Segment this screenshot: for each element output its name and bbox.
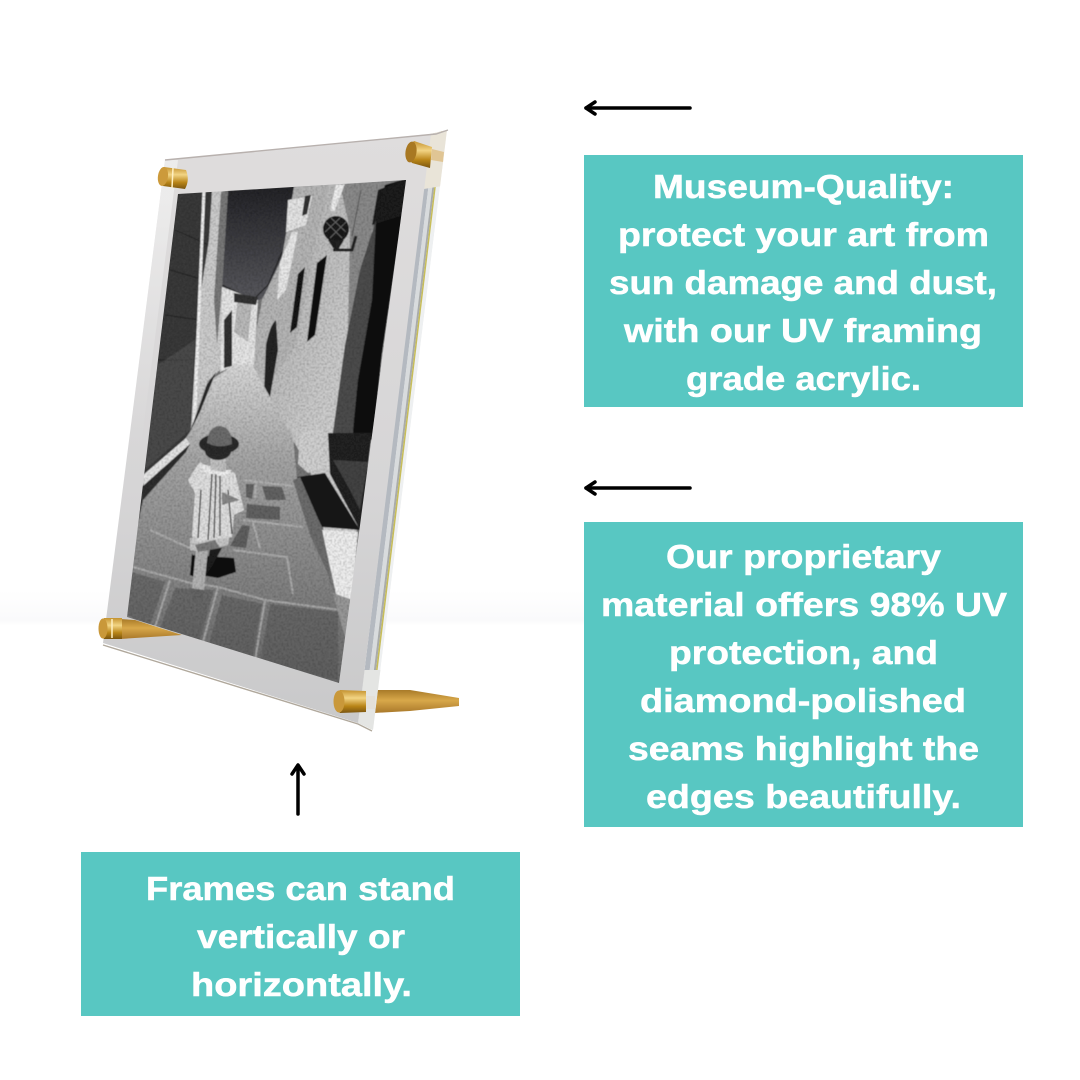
panel background [584, 155, 1023, 407]
lamp [323, 190, 361, 250]
child [188, 426, 244, 603]
standoff: top left [157, 166, 188, 189]
ground [132, 364, 341, 683]
bottom edge line [103, 645, 372, 731]
panel text: horizontally. [191, 966, 412, 1003]
left dark wall [138, 192, 212, 522]
dark doorway [352, 178, 408, 440]
panel text: seams highlight the [628, 730, 979, 767]
standoff: top right [404, 141, 444, 168]
panel text: diamond-polished [640, 682, 966, 719]
neck [210, 456, 226, 472]
collar [200, 462, 232, 476]
acrylic face [103, 134, 431, 723]
standoff: bottom right [334, 690, 375, 713]
panel text: material offers 98% UV [601, 586, 1007, 623]
panel: stand orientation [81, 852, 520, 1016]
left margin highlight [103, 160, 178, 647]
lane dark strip [190, 372, 216, 432]
panel text [609, 168, 997, 397]
building in upper right [277, 188, 306, 370]
panel text: vertically or [197, 918, 405, 955]
power cable [222, 252, 282, 300]
hat [198, 435, 240, 452]
panel text: grade acrylic. [686, 360, 921, 397]
panel text: sun damage and dust, [609, 264, 997, 301]
panel text [146, 870, 455, 1003]
panel: museum-quality [584, 155, 1023, 407]
arrow: to proprietary material panel [586, 482, 690, 494]
panel text: with our UV framing [623, 312, 982, 349]
windows [290, 267, 305, 333]
white wall strip [191, 190, 228, 428]
dark pavers [230, 484, 286, 548]
product photo: acrylic frame [98, 126, 459, 735]
panel text: protection, and [669, 634, 938, 671]
legs [192, 548, 208, 590]
panel text: protect your art from [618, 216, 989, 253]
panel text: Our proprietary [666, 538, 942, 575]
stone ledge and doorstep shadow [297, 473, 360, 530]
shirt [188, 463, 244, 542]
acrylic edge: polished seam strips [358, 130, 447, 730]
panel text: Museum-Quality: [653, 168, 954, 205]
distant alley [220, 287, 258, 372]
shaded upper wall [340, 180, 402, 328]
shadow [192, 555, 236, 578]
right wall [252, 180, 403, 532]
arrow: up to frame [292, 765, 304, 814]
panel: proprietary material [584, 522, 1023, 827]
panel background [81, 852, 520, 1016]
shoe [190, 588, 203, 591]
standoff: bottom left with spike [98, 618, 182, 639]
panel text: edges beautifully. [646, 778, 961, 815]
shorts [190, 537, 230, 552]
black and white street photograph [120, 175, 410, 695]
base [190, 184, 368, 662]
stone door column [332, 220, 376, 440]
panel background [584, 522, 1023, 827]
paving lines [133, 480, 340, 660]
panel text [601, 538, 1007, 815]
rear stand: right foot spike [374, 690, 459, 713]
left wall white base line [142, 438, 190, 486]
arched door [264, 320, 278, 397]
panel text: Frames can stand [146, 870, 455, 907]
top edge line [165, 130, 448, 160]
sky [222, 186, 296, 302]
photo grain [120, 175, 410, 690]
arrow: to museum-quality panel [586, 102, 690, 114]
head and hair [204, 450, 232, 460]
